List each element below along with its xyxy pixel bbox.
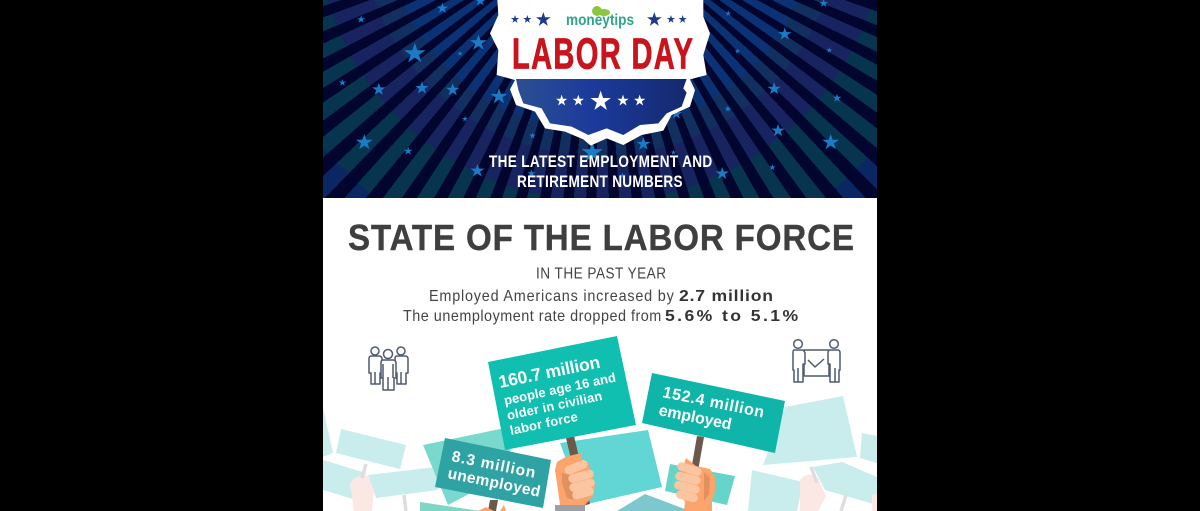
sign: civilian labor force — [488, 336, 636, 450]
mid-tone signs — [423, 428, 515, 505]
badge outline — [490, 0, 710, 146]
sign poles behind — [362, 464, 846, 511]
badge — [490, 0, 710, 146]
stars scattered over the header — [339, 0, 841, 179]
summary text: Employed Americans increased by — [429, 287, 674, 305]
header subtitle: THE LATEST EMPLOYMENT AND — [489, 153, 712, 171]
pole and hand under unemployed sign — [478, 500, 506, 511]
badge title: LABOR DAY — [512, 28, 693, 78]
crowd of protest signs — [323, 396, 877, 511]
summary text: 5.6% to 5.1% — [665, 307, 798, 325]
hand holding right sign — [673, 436, 715, 511]
faded background signs — [323, 396, 877, 511]
sign: civilian labor force: labor force — [509, 409, 579, 438]
sign: employed: employed — [657, 402, 733, 434]
summary text — [403, 266, 798, 325]
sign: unemployed — [435, 438, 551, 508]
summary text: The unemployment rate dropped from — [403, 307, 661, 325]
navy stars beside the logo — [511, 12, 687, 26]
logo icon — [592, 6, 610, 16]
shield stars — [556, 91, 645, 110]
faded hands — [350, 474, 877, 511]
header subtitle: RETIREMENT NUMBERS — [517, 173, 683, 191]
section heading: STATE OF THE LABOR FORCE — [348, 219, 854, 258]
sign: civilian labor force: people age 16 and — [503, 370, 617, 408]
white lower panel — [323, 198, 877, 511]
sign: civilian labor force: older in civilian — [506, 388, 604, 423]
blue shield — [516, 79, 687, 135]
sign: civilian labor force: 160.7 million — [497, 352, 602, 392]
hand holding middle sign — [555, 436, 596, 511]
header sunburst background — [323, 0, 877, 198]
sign: employed: 152.4 million — [661, 384, 766, 421]
summary text: 2.7 million — [679, 287, 773, 305]
sign: unemployed: 8.3 million — [450, 448, 537, 482]
summary text: IN THE PAST YEAR — [536, 266, 666, 283]
header subtitle — [489, 153, 712, 191]
sign: unemployed: unemployed — [446, 465, 542, 501]
icon: three workers — [369, 347, 408, 390]
sign: employed — [642, 373, 785, 453]
logo text: moneytips — [566, 12, 634, 29]
icon: two workers with checked board — [793, 340, 840, 382]
